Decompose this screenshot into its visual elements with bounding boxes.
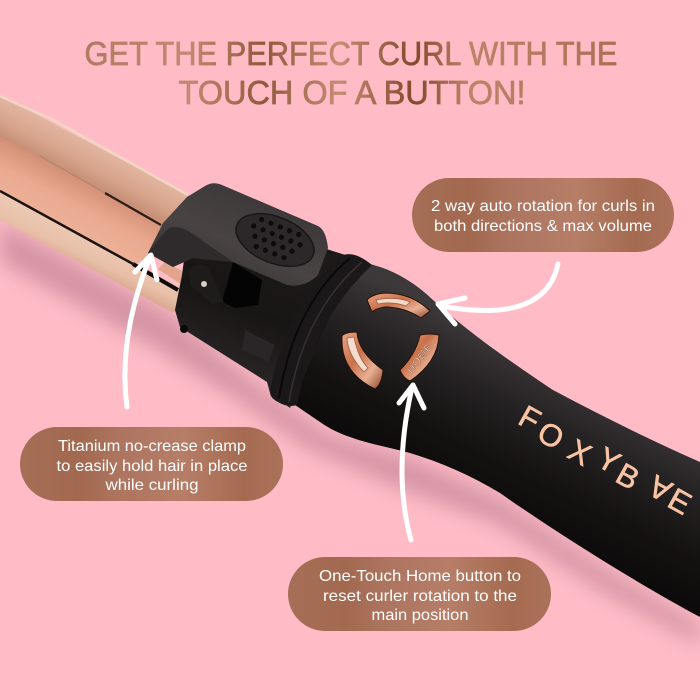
- callout: clamp: to easily hold hair in place: [56, 458, 248, 475]
- button: home: [400, 334, 439, 381]
- callout: clamp: Titanium no-crease clamp: [58, 438, 246, 455]
- shadow beneath curler: [0, 222, 700, 645]
- callout: auto rotation: 2 way auto rotation for curls in: [431, 198, 655, 215]
- lever grip: [228, 203, 322, 277]
- brand name: Y: [591, 440, 626, 481]
- arrow: to rotation button: [438, 264, 558, 324]
- brand name: B: [610, 456, 645, 497]
- brand name: F: [513, 399, 547, 438]
- arrow: to home button: [399, 385, 424, 540]
- button: home: HOME: [405, 342, 435, 376]
- title: TOUCH OF A BUTTON!: [178, 74, 526, 111]
- barrel: lower section: [0, 190, 190, 313]
- callout: home button: One-Touch Home button to: [319, 568, 521, 585]
- callout: home button: [288, 557, 551, 631]
- pivot pin: [188, 265, 224, 304]
- title: [84, 35, 618, 111]
- brand name: [513, 399, 697, 522]
- callout: home button: main position: [372, 607, 468, 624]
- callout: auto rotation: both directions & max volume: [434, 218, 652, 235]
- clamp lever: [148, 183, 328, 286]
- brand name: X: [562, 432, 598, 473]
- brand name: A: [642, 468, 678, 509]
- brand name: O: [532, 414, 570, 457]
- handle body: [285, 262, 700, 617]
- button: rotate right: [367, 293, 430, 318]
- arrow: to clamp: [125, 255, 157, 407]
- barrel: clamp plate: [0, 137, 163, 265]
- button: rotate left: [342, 332, 383, 389]
- callout: auto rotation: [412, 178, 674, 252]
- collar ring: [270, 254, 372, 406]
- callout: home button: reset curler rotation to the: [323, 588, 517, 605]
- brand name: E: [662, 481, 697, 522]
- callout: clamp: while curling: [104, 477, 198, 494]
- callout: clamp: [20, 427, 283, 501]
- clamp head: [175, 215, 355, 408]
- barrel: upper section: [0, 95, 195, 245]
- title: GET THE PERFECT CURL WITH THE: [84, 35, 618, 72]
- curling iron: [0, 95, 700, 617]
